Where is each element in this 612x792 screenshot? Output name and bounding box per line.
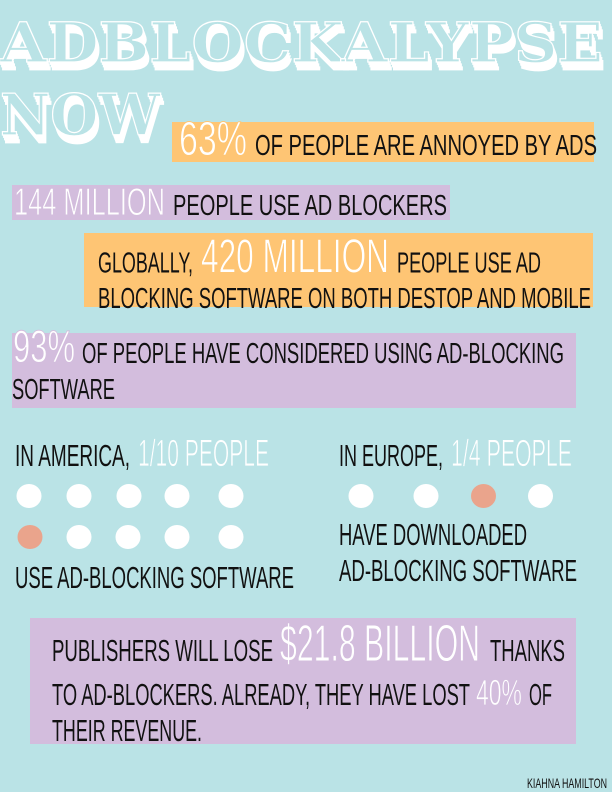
- panel: 63% annoyed by ads: [172, 113, 597, 166]
- text: have downloaded ad-blocking software: [339, 518, 577, 588]
- panel: 420 million globally: GLOBALLY,: [98, 248, 193, 280]
- heading: Europe 1/4 people: IN EUROPE,: [339, 439, 443, 473]
- panel: publishers lose revenue: THEIR REVENUE.: [52, 714, 202, 748]
- text: use ad-blocking software: USE AD-BLOCKING SOFTWARE: [15, 561, 294, 595]
- panel: 144 million use ad blockers: PEOPLE USE AD BLOCKERS: [173, 190, 447, 222]
- dot chart: America 1 in 10: [16, 484, 244, 549]
- panel: 420 million globally: 420 MILLION: [201, 230, 389, 284]
- panel: publishers lose revenue: OF: [529, 678, 552, 712]
- dot chart: Europe 1 in 4: [348, 484, 553, 508]
- heading: Europe 1/4 people: [339, 433, 572, 475]
- title line 1: ADBLOCKALYPSE: ADBLOCKALYPSE: [1, 15, 605, 80]
- panel: publishers lose revenue: PUBLISHERS WILL LOSE: [52, 634, 273, 668]
- title line 1: ADBLOCKALYPSE: ADBLOCKALYPSE: [0, 10, 603, 75]
- panel: publishers lose revenue: [30, 615, 576, 748]
- panel: publishers lose revenue: THANKS: [490, 634, 565, 668]
- panel: publishers lose revenue: 40%: [476, 672, 522, 713]
- panel: 144 million use ad blockers: 144 MILLION: [14, 181, 165, 224]
- title line 2: NOW: NOW: [1, 84, 162, 152]
- panel: 63% annoyed by ads: 63%: [179, 113, 247, 166]
- heading: America 1/10 people: 1/10 PEOPLE: [138, 433, 269, 475]
- title line 2: NOW: NOW: [0, 82, 161, 149]
- panel: 93% considered ad-blocking: [12, 321, 576, 408]
- panel: 144 million use ad blockers: [12, 181, 450, 224]
- heading: America 1/10 people: [15, 433, 269, 475]
- title line 2: NOW: NOW: [2, 87, 163, 154]
- panel: 93% considered ad-blocking: 93%: [13, 321, 75, 372]
- panel: 420 million globally: [84, 230, 593, 315]
- title line 1: ADBLOCKALYPSE: ADBLOCKALYPSE: [0, 12, 604, 78]
- title line 2: NOW: NOW: [3, 90, 164, 157]
- title line 1: ADBLOCKALYPSE: ADBLOCKALYPSE: [2, 18, 606, 83]
- panel: 93% considered ad-blocking: SOFTWARE: [12, 374, 115, 406]
- heading: America 1/10 people: IN AMERICA,: [15, 439, 130, 473]
